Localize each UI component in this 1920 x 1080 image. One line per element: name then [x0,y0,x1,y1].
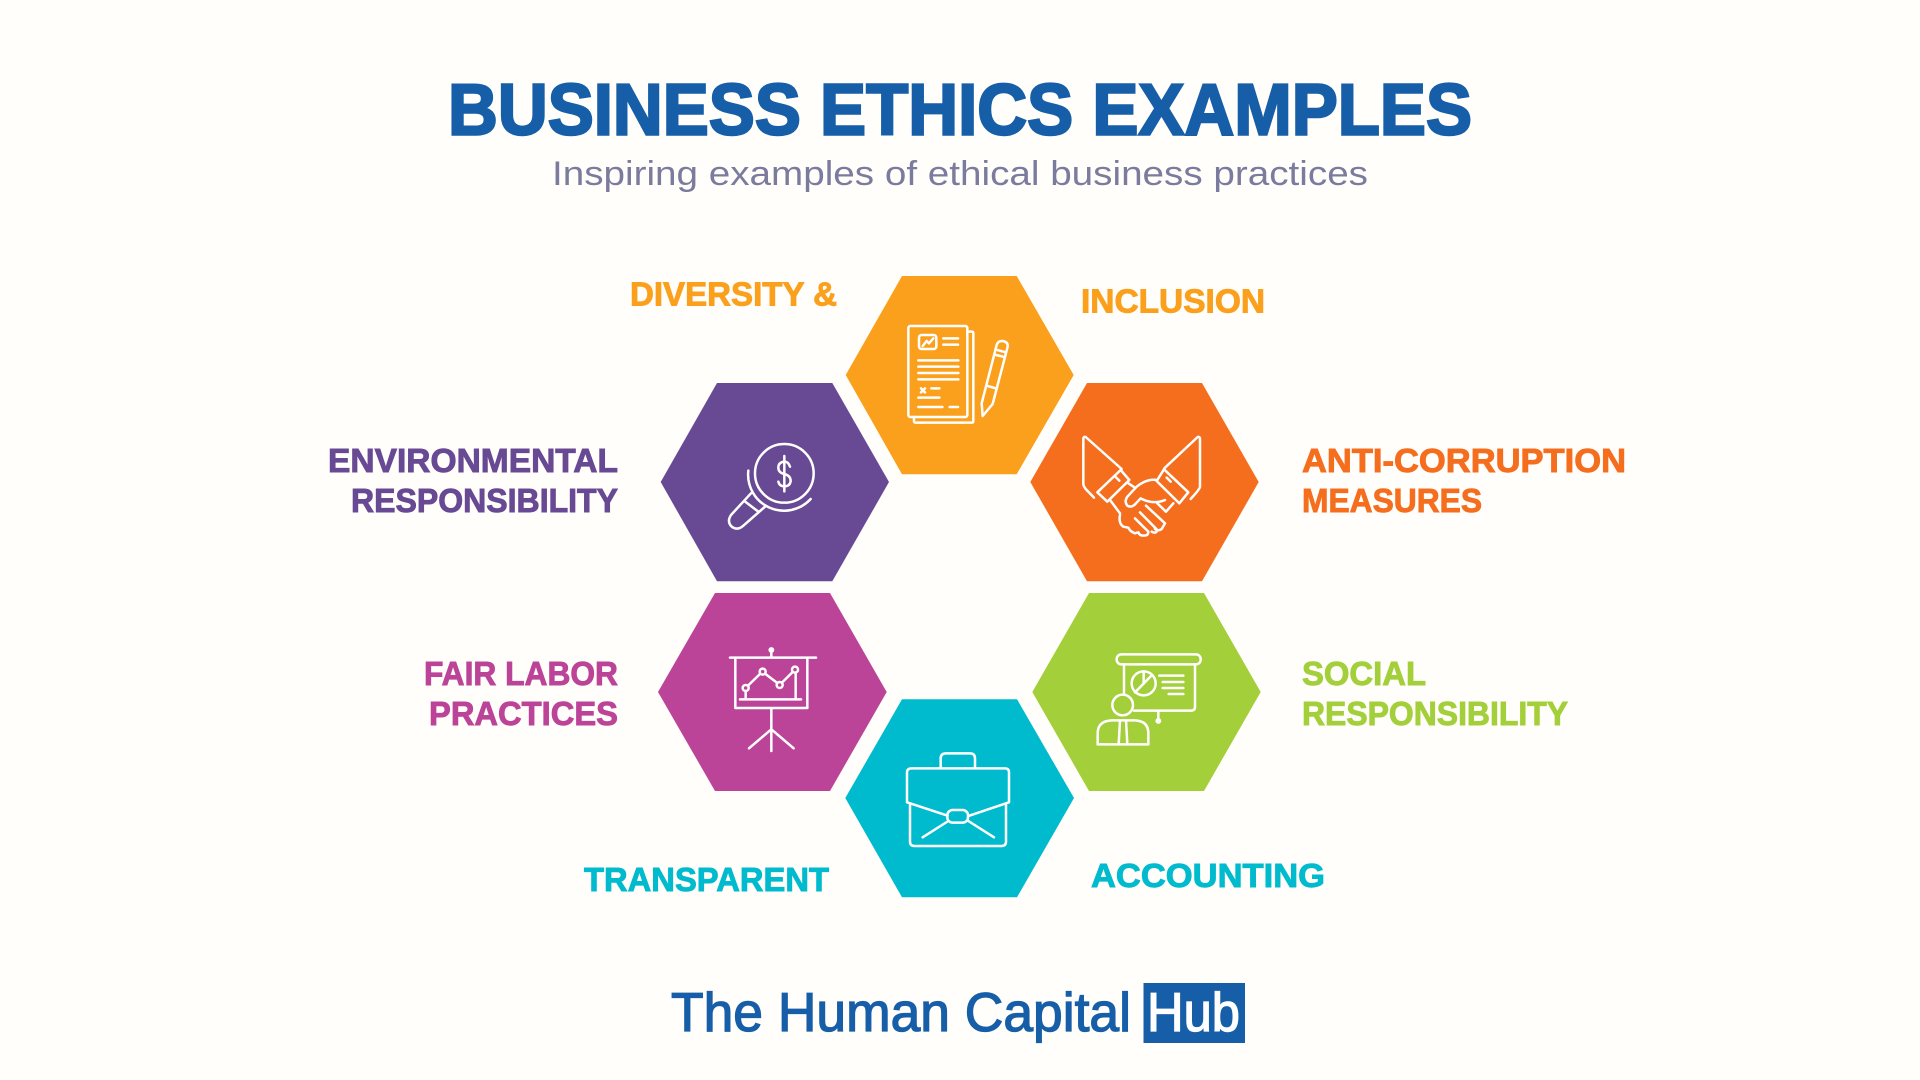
label: fair labor practices [424,655,618,732]
icon: document and pencil [908,326,1008,423]
label: inclusion: INCLUSION [1081,282,1265,320]
logo: The Human Capital Hub [671,981,1245,1043]
panel: anti-corruption measures [1030,383,1626,581]
label: anti-corruption measures [1302,442,1626,519]
hexagon: orange [1030,383,1259,581]
label: environmental responsibility [328,442,618,519]
label: anti-corruption measures: ANTI-CORRUPTION [1302,442,1626,479]
label: accounting: ACCOUNTING [1091,857,1325,894]
panel: transparent accounting [584,699,1325,898]
icon: handshake [1083,437,1200,536]
hexagon: teal [845,699,1074,897]
label: environmental responsibility: ENVIRONMENTAL [328,442,618,479]
label: environmental responsibility: RESPONSIBILITY [351,482,618,519]
icon: briefcase [907,753,1009,846]
hexagon: magenta [658,593,887,791]
label: social responsibility: RESPONSIBILITY [1302,695,1568,732]
label: fair labor practices: FAIR LABOR [424,655,618,692]
label: diversity: DIVERSITY & [630,276,837,312]
subtitle: Inspiring examples of ethical business practices [552,155,1368,193]
label: fair labor practices: PRACTICES [429,695,618,732]
hexagon: yellow-orange [846,276,1074,474]
hexagon: purple [661,383,889,581]
label: transparent: TRANSPARENT [584,861,829,898]
icon: presenter with screen [1098,654,1201,744]
label: anti-corruption measures: MEASURES [1302,482,1482,519]
icon: presentation easel with line chart [730,648,816,751]
icon: magnifier with dollar [729,444,814,529]
label: social responsibility [1302,655,1568,732]
logo wordmark: The Human Capital [671,981,1131,1043]
panel: social responsibility [1032,593,1568,791]
panel: diversity and inclusion [630,276,1265,474]
panel: environmental responsibility [328,383,889,581]
title: BUSINESS ETHICS EXAMPLES [448,70,1472,150]
logo badge [1144,983,1245,1043]
label: social responsibility: SOCIAL [1302,655,1426,692]
panel: fair labor practices [424,593,887,791]
logo badge text: Hub [1147,981,1240,1043]
hexagon: green [1032,593,1261,791]
